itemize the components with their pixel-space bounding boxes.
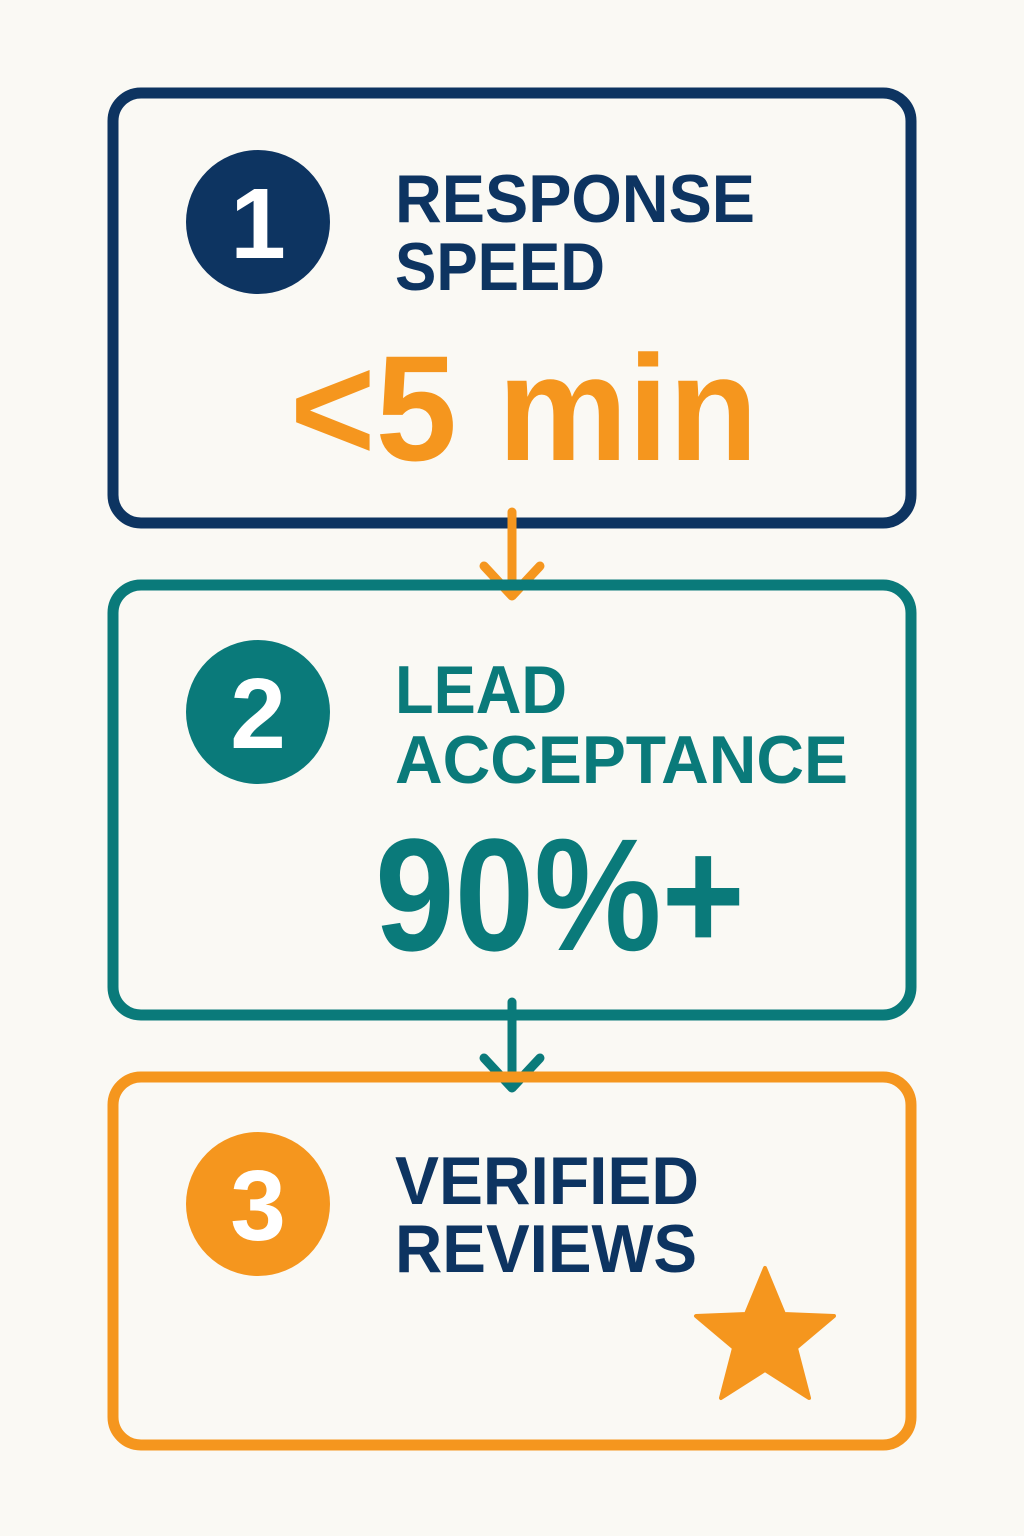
heading: verified reviews: REVIEWS bbox=[395, 1211, 697, 1287]
icon: number 3 circle bbox=[186, 1132, 330, 1276]
icon: number 1 circle bbox=[186, 150, 330, 294]
heading: lead acceptance: LEAD bbox=[395, 652, 567, 728]
heading: lead acceptance: ACCEPTANCE bbox=[395, 722, 848, 798]
heading: response speed: SPEED bbox=[395, 229, 605, 305]
heading: lead acceptance bbox=[395, 652, 848, 798]
arrow: 1 to 2 bbox=[484, 512, 540, 596]
arrow: 2 to 3 bbox=[484, 1002, 540, 1088]
icon: number 2 circle: 2 bbox=[230, 658, 286, 770]
stat: 90%+: 90%+ bbox=[375, 805, 745, 984]
panel: response speed bbox=[113, 93, 911, 523]
heading: response speed: RESPONSE bbox=[395, 161, 755, 237]
panel: lead acceptance bbox=[113, 585, 911, 1015]
icon: number 2 circle bbox=[186, 640, 330, 784]
panel: verified reviews bbox=[113, 1077, 911, 1445]
heading: verified reviews: VERIFIED bbox=[395, 1143, 699, 1219]
heading: response speed bbox=[395, 161, 755, 305]
icon: number 1 circle: 1 bbox=[230, 168, 286, 280]
heading: verified reviews bbox=[395, 1143, 699, 1287]
stat: under 5 min: <5 min bbox=[290, 324, 758, 492]
icon: number 3 circle: 3 bbox=[230, 1150, 286, 1262]
icon: star bbox=[696, 1268, 834, 1398]
